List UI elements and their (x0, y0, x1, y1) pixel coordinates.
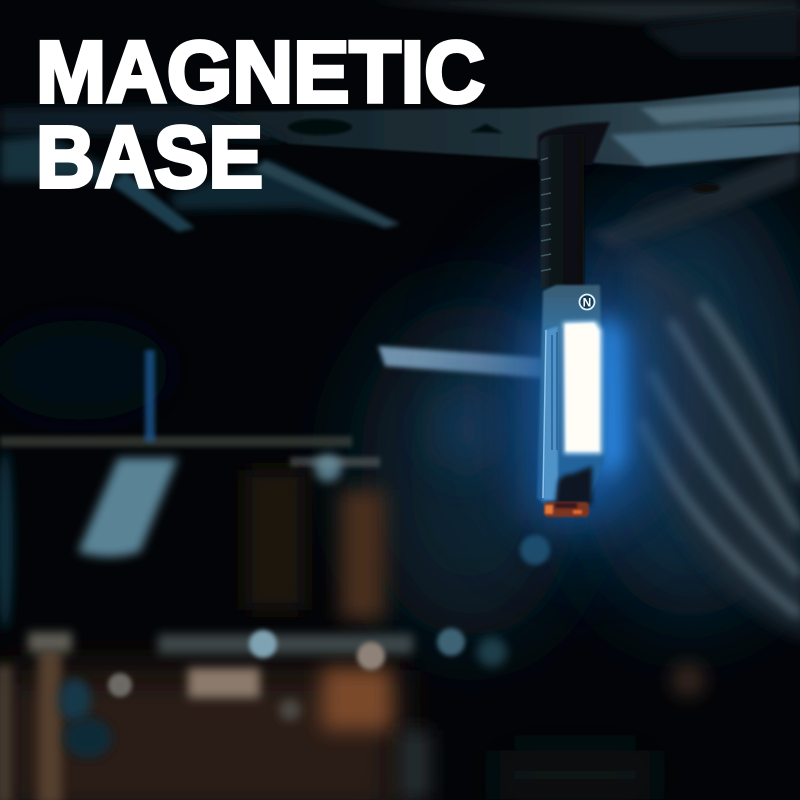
ribbed handle (540, 134, 584, 288)
light glow around lamp (490, 245, 680, 535)
lamp head body (537, 285, 604, 505)
blurred shelf and bokeh background, left side (0, 350, 385, 620)
logo badge (580, 294, 594, 310)
blurred bokeh, centre and lower right (378, 346, 704, 800)
title: BASE (36, 109, 263, 206)
flashlight (537, 122, 610, 517)
title: MAGNETIC (36, 24, 485, 121)
LED panel (563, 321, 602, 454)
logo badge: N (583, 296, 591, 310)
blurred tyre, right side (630, 250, 800, 640)
fins (552, 328, 562, 450)
title (36, 24, 485, 206)
magnetic base top (538, 122, 610, 165)
car underbody (0, 0, 800, 250)
blurred workbench, bottom left (0, 630, 430, 800)
end cap (555, 466, 592, 505)
orange tail (544, 502, 589, 517)
ambient blue haze (0, 180, 800, 640)
